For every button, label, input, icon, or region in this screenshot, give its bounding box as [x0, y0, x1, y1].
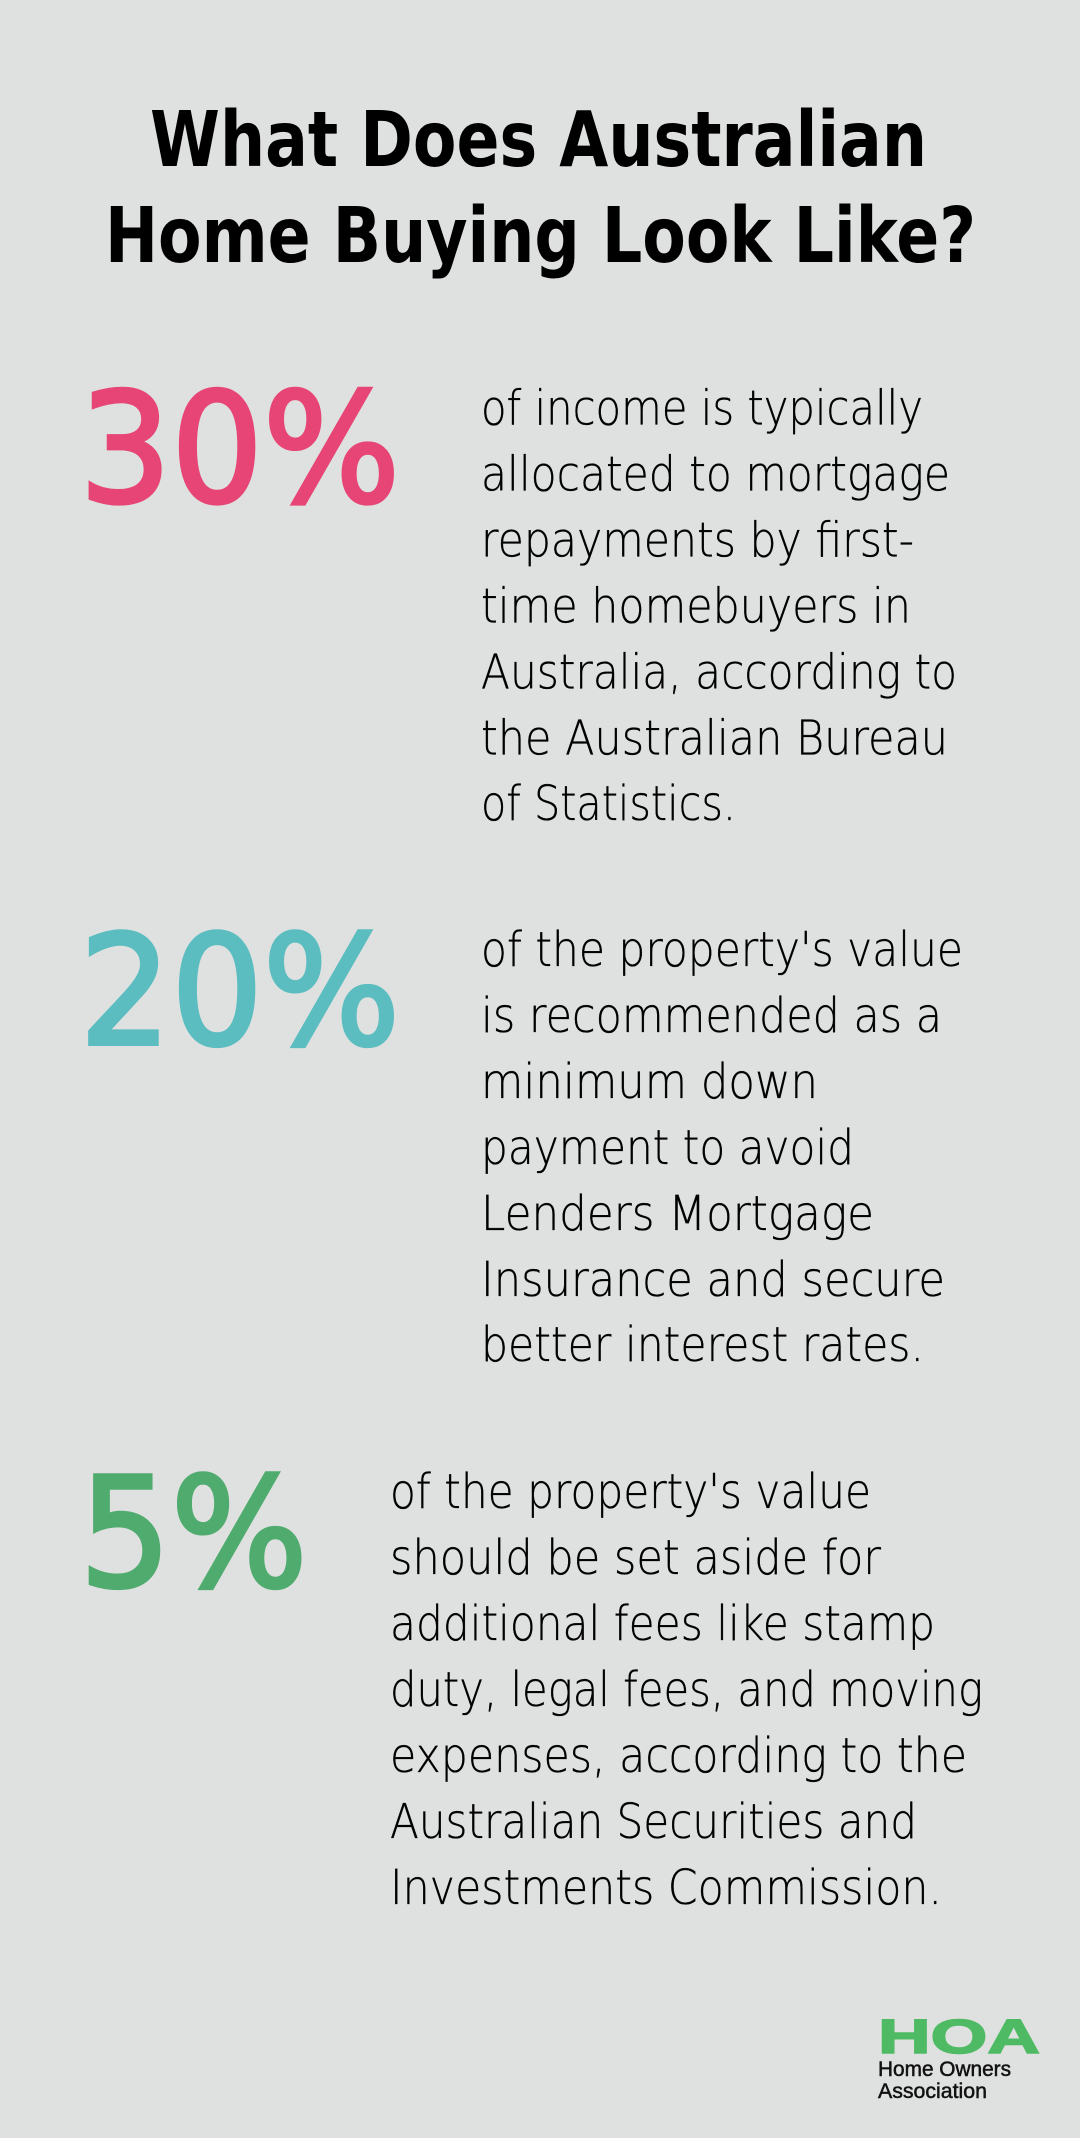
text block: 30% description: of income is typically: [481, 380, 923, 436]
text block: 20% description: better interest rates.: [481, 1317, 924, 1373]
text block: 20% description: is recommended as a: [481, 988, 942, 1044]
text block: 20% description: [481, 922, 963, 1373]
big number: 5%: 5%: [80, 1445, 308, 1622]
logo: Home Owners Association: Association: [878, 2080, 987, 2103]
text block: 20% description: minimum down: [481, 1054, 818, 1110]
text block: 30% description: repayments by first-: [481, 512, 914, 568]
text block: 30% description: of Statistics.: [481, 776, 736, 832]
title: What Does Australian: [150, 96, 927, 185]
text block: 5% description: of the property's value: [390, 1464, 871, 1520]
panel: 5% statistic: [80, 1445, 983, 1916]
title: [105, 96, 976, 281]
logo: Home Owners Association: [878, 2011, 1040, 2103]
big number: 30%: 30%: [80, 360, 400, 538]
text block: 30% description: Australia, according to: [481, 644, 957, 700]
panel: 30% statistic: [80, 360, 957, 832]
text block: 30% description: allocated to mortgage: [481, 446, 950, 502]
big number: 20%: 20%: [80, 903, 400, 1080]
text block: 30% description: [481, 380, 957, 832]
text block: 5% description: expenses, according to the: [390, 1728, 967, 1784]
text block: 20% description: payment to avoid: [481, 1120, 854, 1176]
logo: Home Owners Association: HOA: [878, 2011, 1040, 2064]
logo: Home Owners Association: Home Owners: [878, 2058, 1011, 2081]
text block: 5% description: Investments Commission.: [390, 1860, 942, 1916]
text block: 20% description: of the property's value: [481, 922, 963, 978]
panel: 20% statistic: [80, 903, 963, 1373]
text block: 5% description: should be set aside for: [390, 1530, 881, 1586]
text block: 20% description: Insurance and secure: [481, 1252, 945, 1308]
text block: 30% description: the Australian Bureau: [481, 710, 948, 766]
text block: 30% description: time homebuyers in: [481, 578, 911, 634]
text block: 5% description: [390, 1464, 983, 1916]
text block: 20% description: Lenders Mortgage: [481, 1186, 874, 1242]
text block: 5% description: additional fees like stamp: [390, 1596, 935, 1652]
text block: 5% description: Australian Securities and: [390, 1794, 917, 1850]
text block: 5% description: duty, legal fees, and moving: [390, 1662, 983, 1718]
